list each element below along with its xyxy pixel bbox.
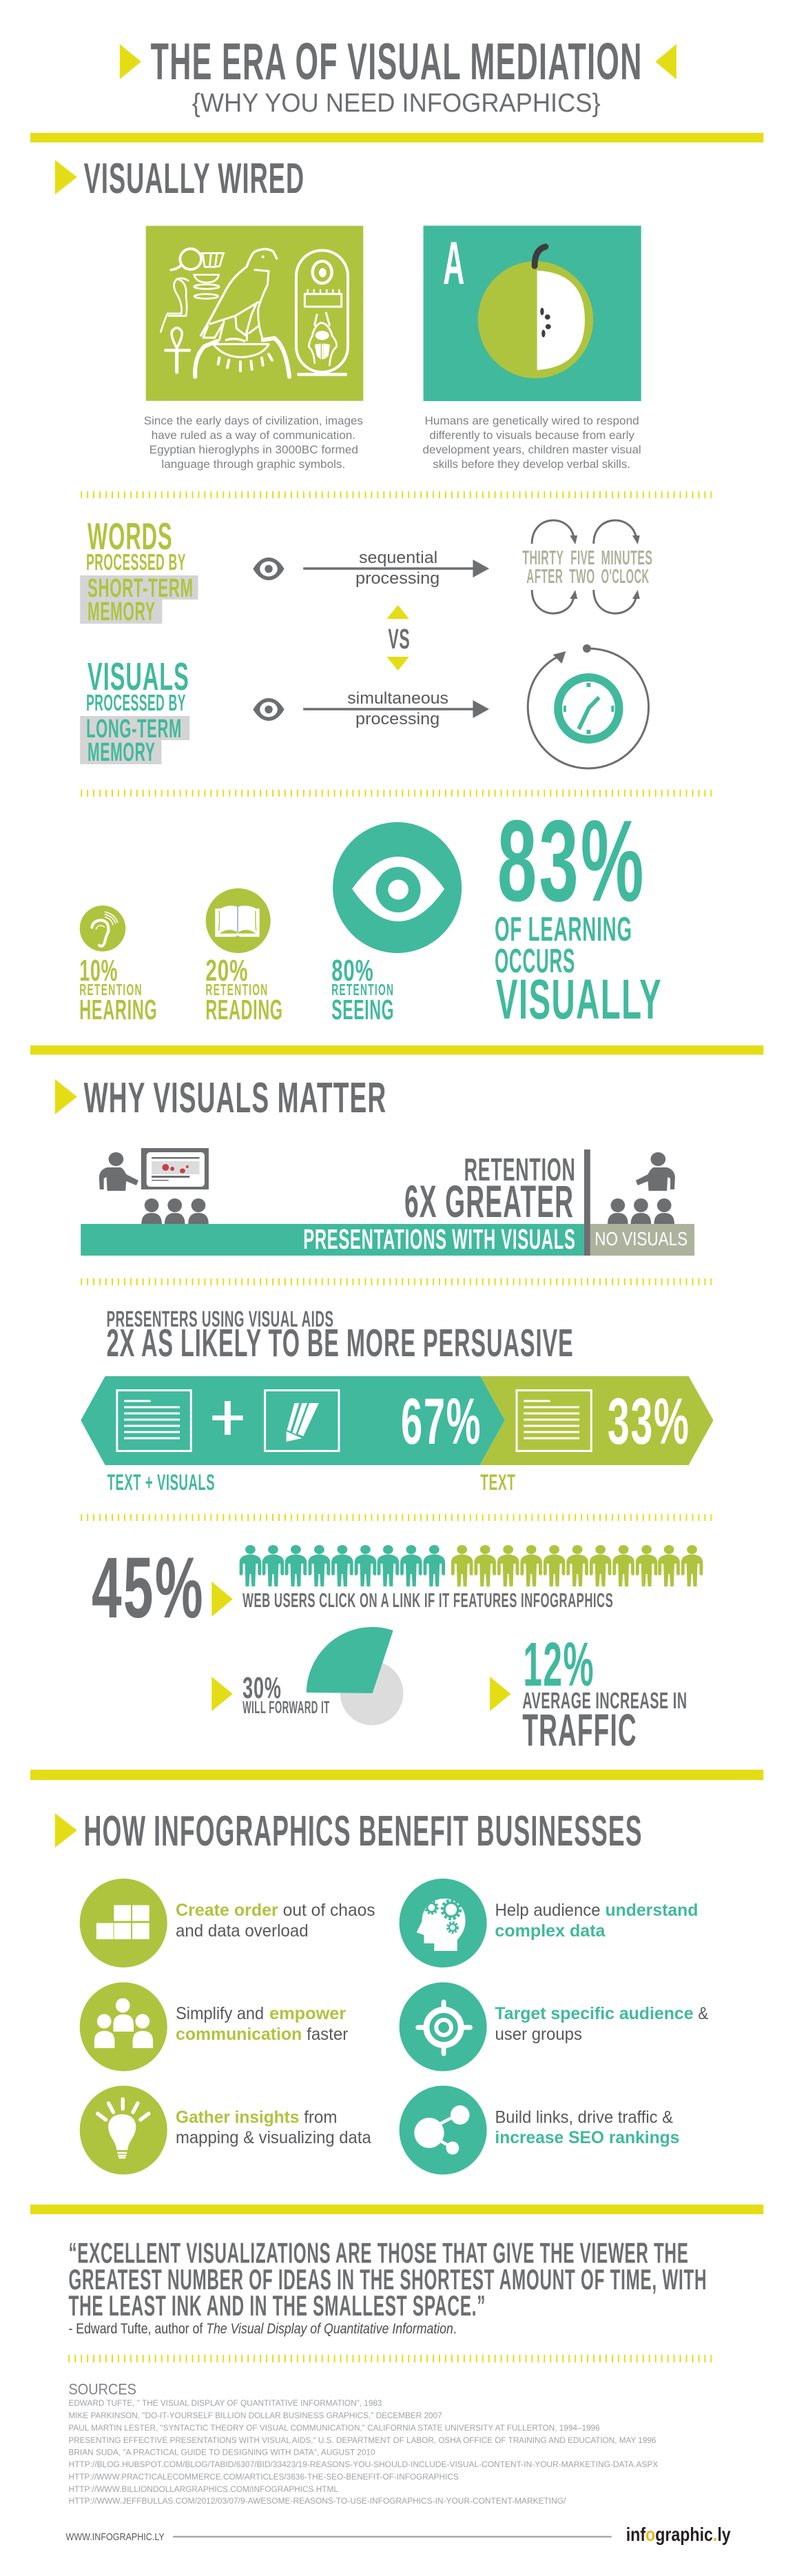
panel: visuals label: VISUALS xyxy=(87,655,189,698)
icon: presenter without visuals xyxy=(608,1152,675,1224)
sources list: HTTP://WWW.BILLIONDOLLARGRAPHICS.COM/INFOGRAPHICS.HTML xyxy=(68,2484,338,2494)
icon: ear xyxy=(80,906,125,952)
stat: 12 percent: 12% xyxy=(523,1629,595,1699)
stat: 12 percent: AVERAGE INCREASE IN xyxy=(522,1688,688,1714)
caption: hieroglyphs: language through graphic symbols. xyxy=(161,458,345,471)
comparison bar: NO VISUALS xyxy=(595,1228,688,1249)
text: insights xyxy=(176,2108,371,2147)
text: seo: increase SEO rankings xyxy=(495,2129,679,2147)
caption: apple xyxy=(423,415,641,471)
icon: lightbulb xyxy=(80,2085,167,2175)
text: insights: Gather insights xyxy=(176,2108,299,2127)
caption: hieroglyphs: Egyptian hieroglyphs in 3000BC formed xyxy=(149,444,358,456)
label: text: TEXT xyxy=(480,1470,515,1495)
icon: pencil xyxy=(265,1391,339,1451)
panel: apple xyxy=(424,226,641,401)
sources list: HTTP://BLOG.HUBSPOT.COM/BLOG/TABID/6307/BID/33423/19-REASONS-YOU-SHOULD-INCLUDE-VISUAL-CONTENT-IN-YOUR-MARKETING-DATA.ASPX xyxy=(68,2460,658,2469)
icon: document text xyxy=(517,1391,591,1451)
icon: brain gears xyxy=(400,1879,487,1967)
stat: 33 percent: 33% xyxy=(608,1384,690,1458)
vs marker xyxy=(386,605,410,671)
stat: retention 6x: 6X GREATER xyxy=(404,1176,574,1227)
panel: visuals label: LONG-TERM xyxy=(86,714,182,743)
panel: apple: A xyxy=(443,229,466,297)
panel: words label: MEMORY xyxy=(87,597,156,626)
stat: 12 percent xyxy=(490,1629,688,1755)
sources list xyxy=(68,2398,658,2506)
heading: presenters using visual aids xyxy=(107,1307,574,1364)
text: seo xyxy=(495,2108,679,2147)
stat: 83 percent xyxy=(495,797,662,1031)
icon: squares xyxy=(80,1879,167,1967)
text: empower xyxy=(176,2005,348,2044)
sequential words with arrows xyxy=(522,520,652,613)
icon: clock xyxy=(528,644,649,768)
icon: eye xyxy=(253,698,285,721)
text: empower: empower xyxy=(269,2005,347,2023)
text: create order: Create order xyxy=(176,1901,278,1920)
panel: visuals label: PROCESSED BY xyxy=(86,691,186,716)
stat: 30 percent: 30% xyxy=(242,1672,282,1705)
stat: 45 percent: 45% xyxy=(92,1540,205,1636)
panel: words label xyxy=(80,515,198,626)
divider bar 3 xyxy=(30,1770,763,1780)
text: target xyxy=(495,2005,709,2044)
sources list: HTTP://WWW.JEFFBULLAS.COM/2012/03/07/9-AWESOME-REASONS-TO-USE-INFOGRAPHICS-IN-YOUR-CONTENT-MARKETING/ xyxy=(68,2496,566,2506)
text: create order: and data overload xyxy=(176,1922,309,1941)
sequential words with arrows: THIRTY xyxy=(522,547,564,569)
stat: seeing xyxy=(331,954,394,1025)
quote xyxy=(68,2237,707,2322)
sequential words with arrows: O'CLOCK xyxy=(601,566,650,588)
text: seo: Build links, drive traffic & xyxy=(495,2108,673,2127)
heading: visually wired: VISUALLY WIRED xyxy=(84,155,304,203)
footer: WWW.INFOGRAPHIC.LY xyxy=(66,2532,165,2543)
stat: hearing xyxy=(79,954,157,1025)
arrow: sequential processing: sequential xyxy=(359,549,437,567)
text: empower: faster xyxy=(307,2025,348,2044)
stat: hearing: RETENTION xyxy=(79,981,143,999)
text: target: & xyxy=(698,2005,709,2023)
divider bar 4 xyxy=(30,2205,763,2214)
heading: visually wired xyxy=(55,155,304,203)
icon: target xyxy=(400,1982,487,2072)
stat: retention 6x xyxy=(404,1152,576,1227)
heading: why visuals matter: WHY VISUALS MATTER xyxy=(84,1074,386,1122)
sources list: EDWARD TUFTE, " THE VISUAL DISPLAY OF QUANTITATIVE INFORMATION", 1983 xyxy=(68,2398,382,2408)
text: create order: out of chaos xyxy=(283,1901,375,1920)
panel: visuals label xyxy=(80,655,189,766)
quote attribution: - Edward Tufte, author of The Visual Display of Quantitative Information. xyxy=(68,2321,457,2337)
caption: apple: skills before they develop verbal skills. xyxy=(433,458,630,471)
sources list: BRIAN SUDA, "A PRACTICAL GUIDE TO DESIGNING WITH DATA", AUGUST 2010 xyxy=(68,2448,375,2457)
text: understand: understand xyxy=(605,1901,698,1920)
icon: plus xyxy=(212,1401,243,1435)
stat: 30 percent xyxy=(211,1672,330,1717)
sequential words with arrows: AFTER xyxy=(526,566,563,588)
pictogram: people xyxy=(240,1545,703,1586)
text: empower: communication xyxy=(176,2025,302,2044)
text: empower: Simplify and xyxy=(176,2005,264,2023)
sources heading: SOURCES xyxy=(68,2380,136,2398)
icon: presenter with screen xyxy=(99,1148,209,1224)
stat: reading xyxy=(205,954,283,1025)
sources list: PAUL MARTIN LESTER, "SYNTACTIC THEORY OF VISUAL COMMUNICATION," CALIFORNIA STATE UNIVERSITY AT FULLERTON, 1994–1996 xyxy=(68,2423,600,2433)
arrow: simultaneous processing: processing xyxy=(355,710,440,728)
icon: people group xyxy=(80,1982,167,2072)
sources list: PRESENTING EFFECTIVE PRESENTATIONS WITH VISUAL AIDS," U.S. DEPARTMENT OF LABOR, OSHA OFFICE OF TRAINING AND EDUCATION, MAY 1996 xyxy=(68,2435,657,2445)
text: target: user groups xyxy=(495,2025,582,2044)
caption: hieroglyphs xyxy=(144,415,363,471)
panel: persuasion band xyxy=(81,1376,714,1465)
panel: words label: PROCESSED BY xyxy=(86,550,186,575)
quote: THE LEAST INK AND IN THE SMALLEST SPACE.” xyxy=(68,2290,486,2322)
stat: 83 percent: 83% xyxy=(497,797,646,926)
icon: book xyxy=(206,888,271,953)
stat: reading: 20% xyxy=(205,954,248,988)
stat: 83 percent: OCCURS xyxy=(495,943,575,980)
comparison bar xyxy=(81,1149,694,1256)
panel: words label: SHORT-TERM xyxy=(87,573,194,602)
icon: eye xyxy=(253,558,285,580)
caption: apple: development years, children master visual xyxy=(423,444,641,456)
caption: apple: Humans are genetically wired to respond xyxy=(425,415,639,427)
divider bar 1 xyxy=(30,133,763,143)
sequential words with arrows: MINUTES xyxy=(601,547,652,569)
stat: 67 percent: 67% xyxy=(401,1384,482,1458)
sequential words with arrows: FIVE xyxy=(570,547,595,569)
icon: document xyxy=(117,1391,191,1451)
arrow: sequential processing: processing xyxy=(355,569,440,588)
text: understand: complex data xyxy=(495,1922,606,1941)
text: target: Target specific audience xyxy=(495,2005,694,2023)
vs marker: VS xyxy=(388,623,410,655)
stat: seeing: 80% xyxy=(331,954,374,988)
stat: 83 percent: OF LEARNING xyxy=(495,911,632,948)
divider bar 2 xyxy=(30,1045,763,1054)
icon: share links xyxy=(400,2085,487,2175)
arrow: sequential processing xyxy=(303,549,489,588)
stat: 12 percent: TRAFFIC xyxy=(522,1705,637,1755)
stat: reading: RETENTION xyxy=(205,981,269,999)
icon: big eye xyxy=(333,822,462,953)
panel: hieroglyphs xyxy=(146,226,363,401)
arrow: simultaneous processing xyxy=(303,689,489,728)
text: insights: from xyxy=(304,2108,337,2127)
text: understand xyxy=(495,1901,698,1941)
text: create order xyxy=(176,1901,375,1941)
label: text plus visuals: TEXT + VISUALS xyxy=(107,1470,215,1495)
pie chart xyxy=(307,1627,403,1726)
panel: words label: WORDS xyxy=(87,515,173,558)
heading: why visuals matter xyxy=(55,1074,386,1122)
comparison bar: PRESENTATIONS WITH VISUALS xyxy=(303,1223,576,1255)
footer xyxy=(66,2524,731,2545)
footer: infographic.ly xyxy=(626,2524,731,2545)
sources list: MIKE PARKINSON, "DO-IT-YOURSELF BILLION DOLLAR BUSINESS GRAPHICS," DECEMBER 2007 xyxy=(68,2411,442,2420)
caption: hieroglyphs: Since the early days of civilization, images xyxy=(144,415,363,427)
sequential words with arrows: TWO xyxy=(569,566,595,588)
stat: retention 6x: RETENTION xyxy=(464,1152,576,1187)
caption: apple: differently to visuals because from early xyxy=(429,429,635,442)
stat: seeing: RETENTION xyxy=(331,981,394,999)
text: understand: Help audience xyxy=(495,1901,601,1920)
subtitle: {WHY YOU NEED INFOGRAPHICS} xyxy=(192,88,601,117)
caption: hieroglyphs: have ruled as a way of communication. xyxy=(152,429,355,442)
heading: presenters using visual aids: PRESENTERS USING VISUAL AIDS xyxy=(107,1307,334,1331)
stat: 83 percent: VISUALLY xyxy=(496,968,662,1031)
stat: reading: READING xyxy=(205,994,283,1025)
stat: seeing: SEEING xyxy=(331,994,394,1025)
text: insights: mapping & visualizing data xyxy=(176,2129,371,2147)
arrow: simultaneous processing: simultaneous xyxy=(347,689,448,708)
stat: hearing: HEARING xyxy=(79,994,157,1025)
panel: visuals label: MEMORY xyxy=(87,737,156,766)
sources list: HTTP://WWW.PRACTICALECOMMERCE.COM/ARTICLES/3636-THE-SEO-BENEFIT-OF-INFOGRAPHICS xyxy=(68,2472,459,2482)
stat: 30 percent: WILL FORWARD IT xyxy=(242,1699,330,1717)
stat: hearing: 10% xyxy=(79,954,118,988)
